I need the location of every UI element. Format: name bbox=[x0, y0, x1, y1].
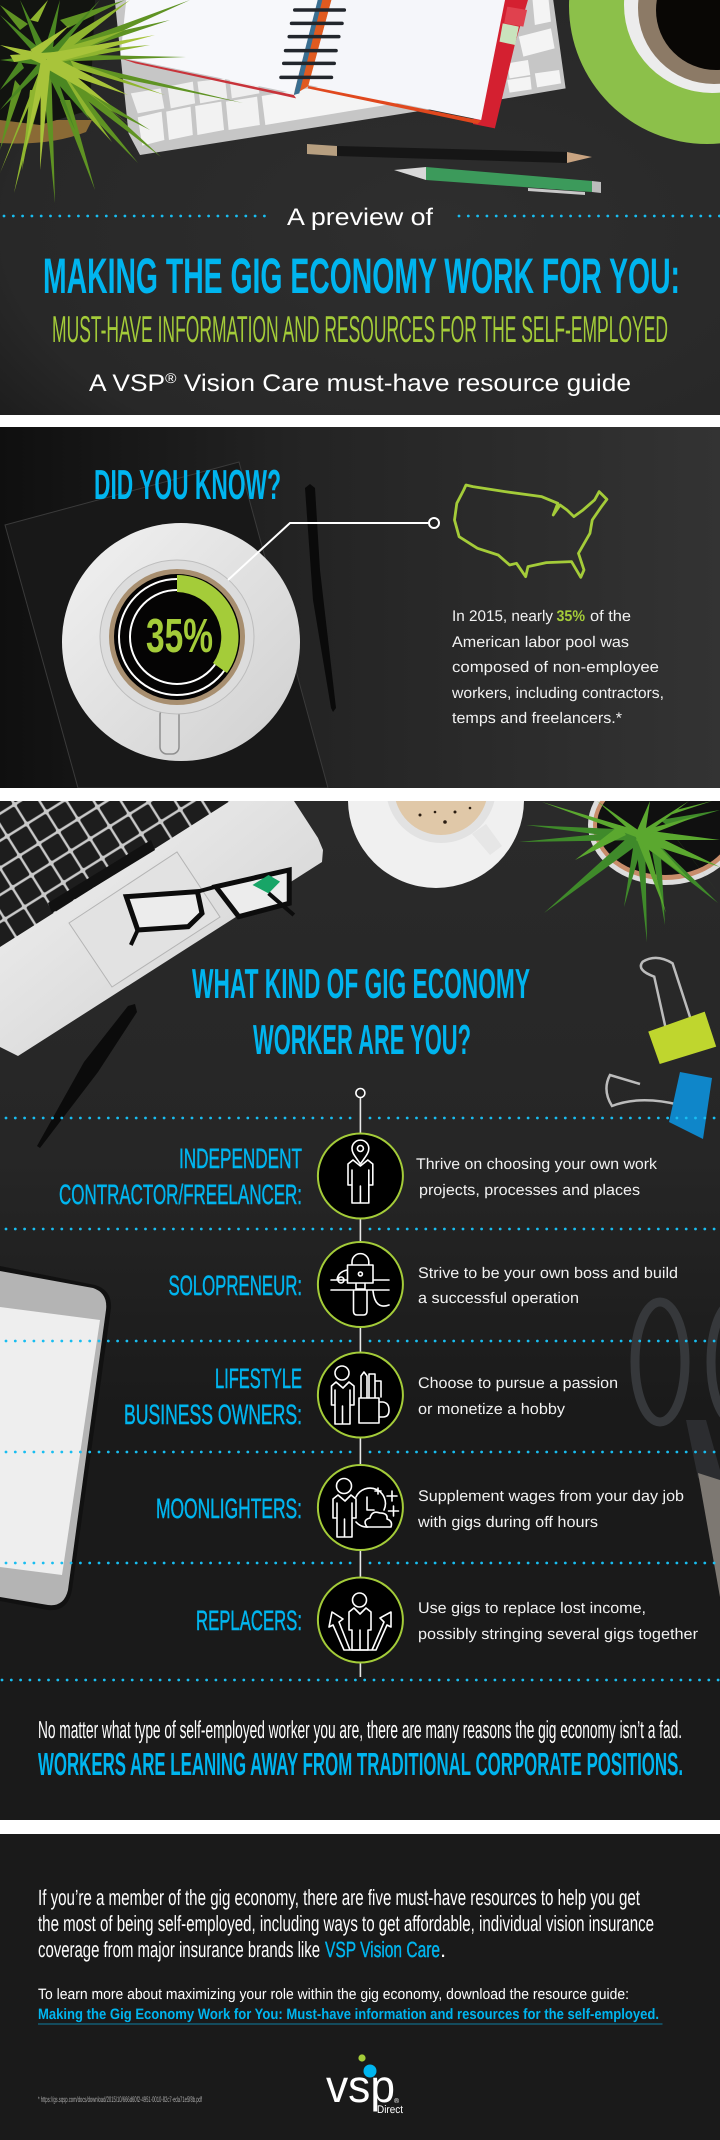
photo: green binder clip bbox=[641, 958, 716, 1064]
logo: VSP Direct: vsp bbox=[326, 2060, 395, 2112]
text: labor pool statistic: temps and freelancers.* bbox=[452, 710, 622, 727]
description: with gigs during off hours bbox=[417, 1514, 598, 1531]
label: lifestyle business owners: LIFESTYLE bbox=[215, 1363, 302, 1394]
photo: scissors bbox=[635, 1302, 720, 1597]
text: labor pool statistic bbox=[451, 608, 664, 727]
icon: person with diverging arrows bbox=[318, 1578, 403, 1662]
photo: coffee cup and saucer bbox=[348, 801, 524, 888]
photo: green pen bbox=[394, 167, 601, 195]
photo: saucer and cup bbox=[62, 523, 300, 761]
label: independent contractor: CONTRACTOR/FREELANCER: bbox=[59, 1179, 302, 1210]
description bbox=[418, 1375, 618, 1418]
dotted rows right bbox=[2, 1118, 720, 1680]
text: five must-have resources: . bbox=[440, 1937, 446, 1962]
label: moonlighters: MOONLIGHTERS: bbox=[156, 1493, 302, 1524]
heading: did you know: DID YOU KNOW? bbox=[94, 461, 281, 508]
timeline spine bbox=[356, 1088, 365, 1677]
preview label: A preview of bbox=[287, 204, 433, 231]
description: Supplement wages from your day job bbox=[418, 1488, 684, 1505]
label: lifestyle business owners bbox=[124, 1363, 302, 1430]
text: five must-have resources: coverage from major insurance brands like bbox=[38, 1937, 320, 1962]
panel: did you know bbox=[0, 427, 720, 788]
label: replacers: REPLACERS: bbox=[196, 1605, 302, 1636]
label: lifestyle business owners: BUSINESS OWNERS: bbox=[124, 1399, 302, 1430]
text: labor pool statistic: workers, including contractors, bbox=[451, 685, 664, 702]
description: a successful operation bbox=[418, 1290, 579, 1307]
description: or monetize a hobby bbox=[418, 1401, 565, 1418]
text: labor pool statistic: composed of non-employee bbox=[452, 659, 659, 676]
description: Choose to pursue a passion bbox=[418, 1375, 618, 1392]
photo: blue binder clip bbox=[606, 1072, 712, 1139]
chart: 35% donut bbox=[119, 575, 239, 695]
row: moonlighters bbox=[156, 1465, 684, 1550]
label: independent contractor: INDEPENDENT bbox=[179, 1143, 302, 1174]
label: solopreneur: SOLOPRENEUR: bbox=[168, 1270, 302, 1301]
row: replacers bbox=[196, 1578, 698, 1662]
text: labor pool statistic: of the bbox=[590, 608, 631, 625]
description: possibly stringing several gigs together bbox=[418, 1626, 698, 1643]
photo: pen bbox=[305, 484, 336, 712]
connector line bbox=[228, 518, 439, 580]
row: independent contractor bbox=[59, 1134, 657, 1218]
text: five must-have resources: VSP Vision Care bbox=[325, 1937, 440, 1962]
resource guide line: Vision Care must-have resource guide bbox=[176, 370, 631, 397]
icon: person at laptop desk bbox=[318, 1242, 403, 1327]
photo: plant bbox=[0, 0, 243, 203]
photo: spiral binding bbox=[281, 10, 344, 77]
icon: US map outline bbox=[455, 485, 607, 577]
panel: closing bbox=[0, 1834, 720, 2140]
photo: green saucer and coffee cup bbox=[569, 0, 720, 144]
photo: phone bbox=[0, 1266, 111, 1610]
text: labor pool statistic: In 2015, nearly bbox=[452, 608, 553, 625]
description: projects, processes and places bbox=[419, 1182, 640, 1199]
text: labor pool statistic: American labor pool was bbox=[452, 634, 629, 651]
logo: VSP Direct: ® bbox=[394, 2098, 400, 2105]
photo: notebook bbox=[120, 0, 528, 128]
photo: pencil bbox=[307, 144, 592, 163]
footnote: * https://gs.sqsp.com/docs/download/2015/10/666d60f2-4951-0010-82c7-eda71e5f8b.pdf bbox=[38, 2095, 202, 2104]
description bbox=[417, 1488, 684, 1531]
description: Thrive on choosing your own work bbox=[416, 1156, 657, 1173]
photo: glasses bbox=[126, 870, 294, 945]
text: learn more: To learn more about maximizing your role within the gig economy, download the resource guide: bbox=[38, 1986, 629, 2003]
dotted rule right bbox=[459, 215, 720, 217]
row: lifestyle business owners bbox=[124, 1352, 618, 1438]
dotted rows left bbox=[6, 1118, 351, 1563]
description bbox=[416, 1156, 657, 1199]
heading: what kind of worker bbox=[192, 968, 530, 1054]
description bbox=[418, 1265, 678, 1307]
dotted rule left bbox=[4, 215, 268, 217]
resource guide line: ® bbox=[165, 370, 177, 386]
resource guide line: A VSP bbox=[89, 370, 158, 397]
heading: what kind of worker: WORKER ARE YOU? bbox=[253, 1016, 471, 1063]
logo: VSP Direct: Direct bbox=[377, 2104, 403, 2116]
icon: person with clock and night sky bbox=[318, 1465, 403, 1550]
text: five must-have resources bbox=[38, 1885, 654, 1962]
description bbox=[418, 1600, 698, 1643]
photo: laptop bbox=[0, 801, 323, 1056]
panel: worker types bbox=[0, 712, 720, 1820]
icon: person with location pin bbox=[318, 1134, 403, 1218]
text: labor pool statistic: 35% bbox=[556, 608, 585, 625]
row: solopreneur bbox=[168, 1242, 678, 1327]
photo: leather notebook bbox=[5, 462, 328, 788]
stat: 35%: 35% bbox=[146, 610, 213, 663]
photo: black pen bbox=[37, 1004, 137, 1148]
icon: person with mug and pencils bbox=[318, 1352, 403, 1438]
panel: header bbox=[0, 0, 720, 415]
label: independent contractor bbox=[59, 1143, 302, 1210]
description: Strive to be your own boss and build bbox=[418, 1265, 678, 1282]
description: Use gigs to replace lost income, bbox=[418, 1600, 646, 1617]
photo: potted plant bbox=[520, 801, 720, 942]
photo: keyboard bbox=[115, 0, 566, 155]
